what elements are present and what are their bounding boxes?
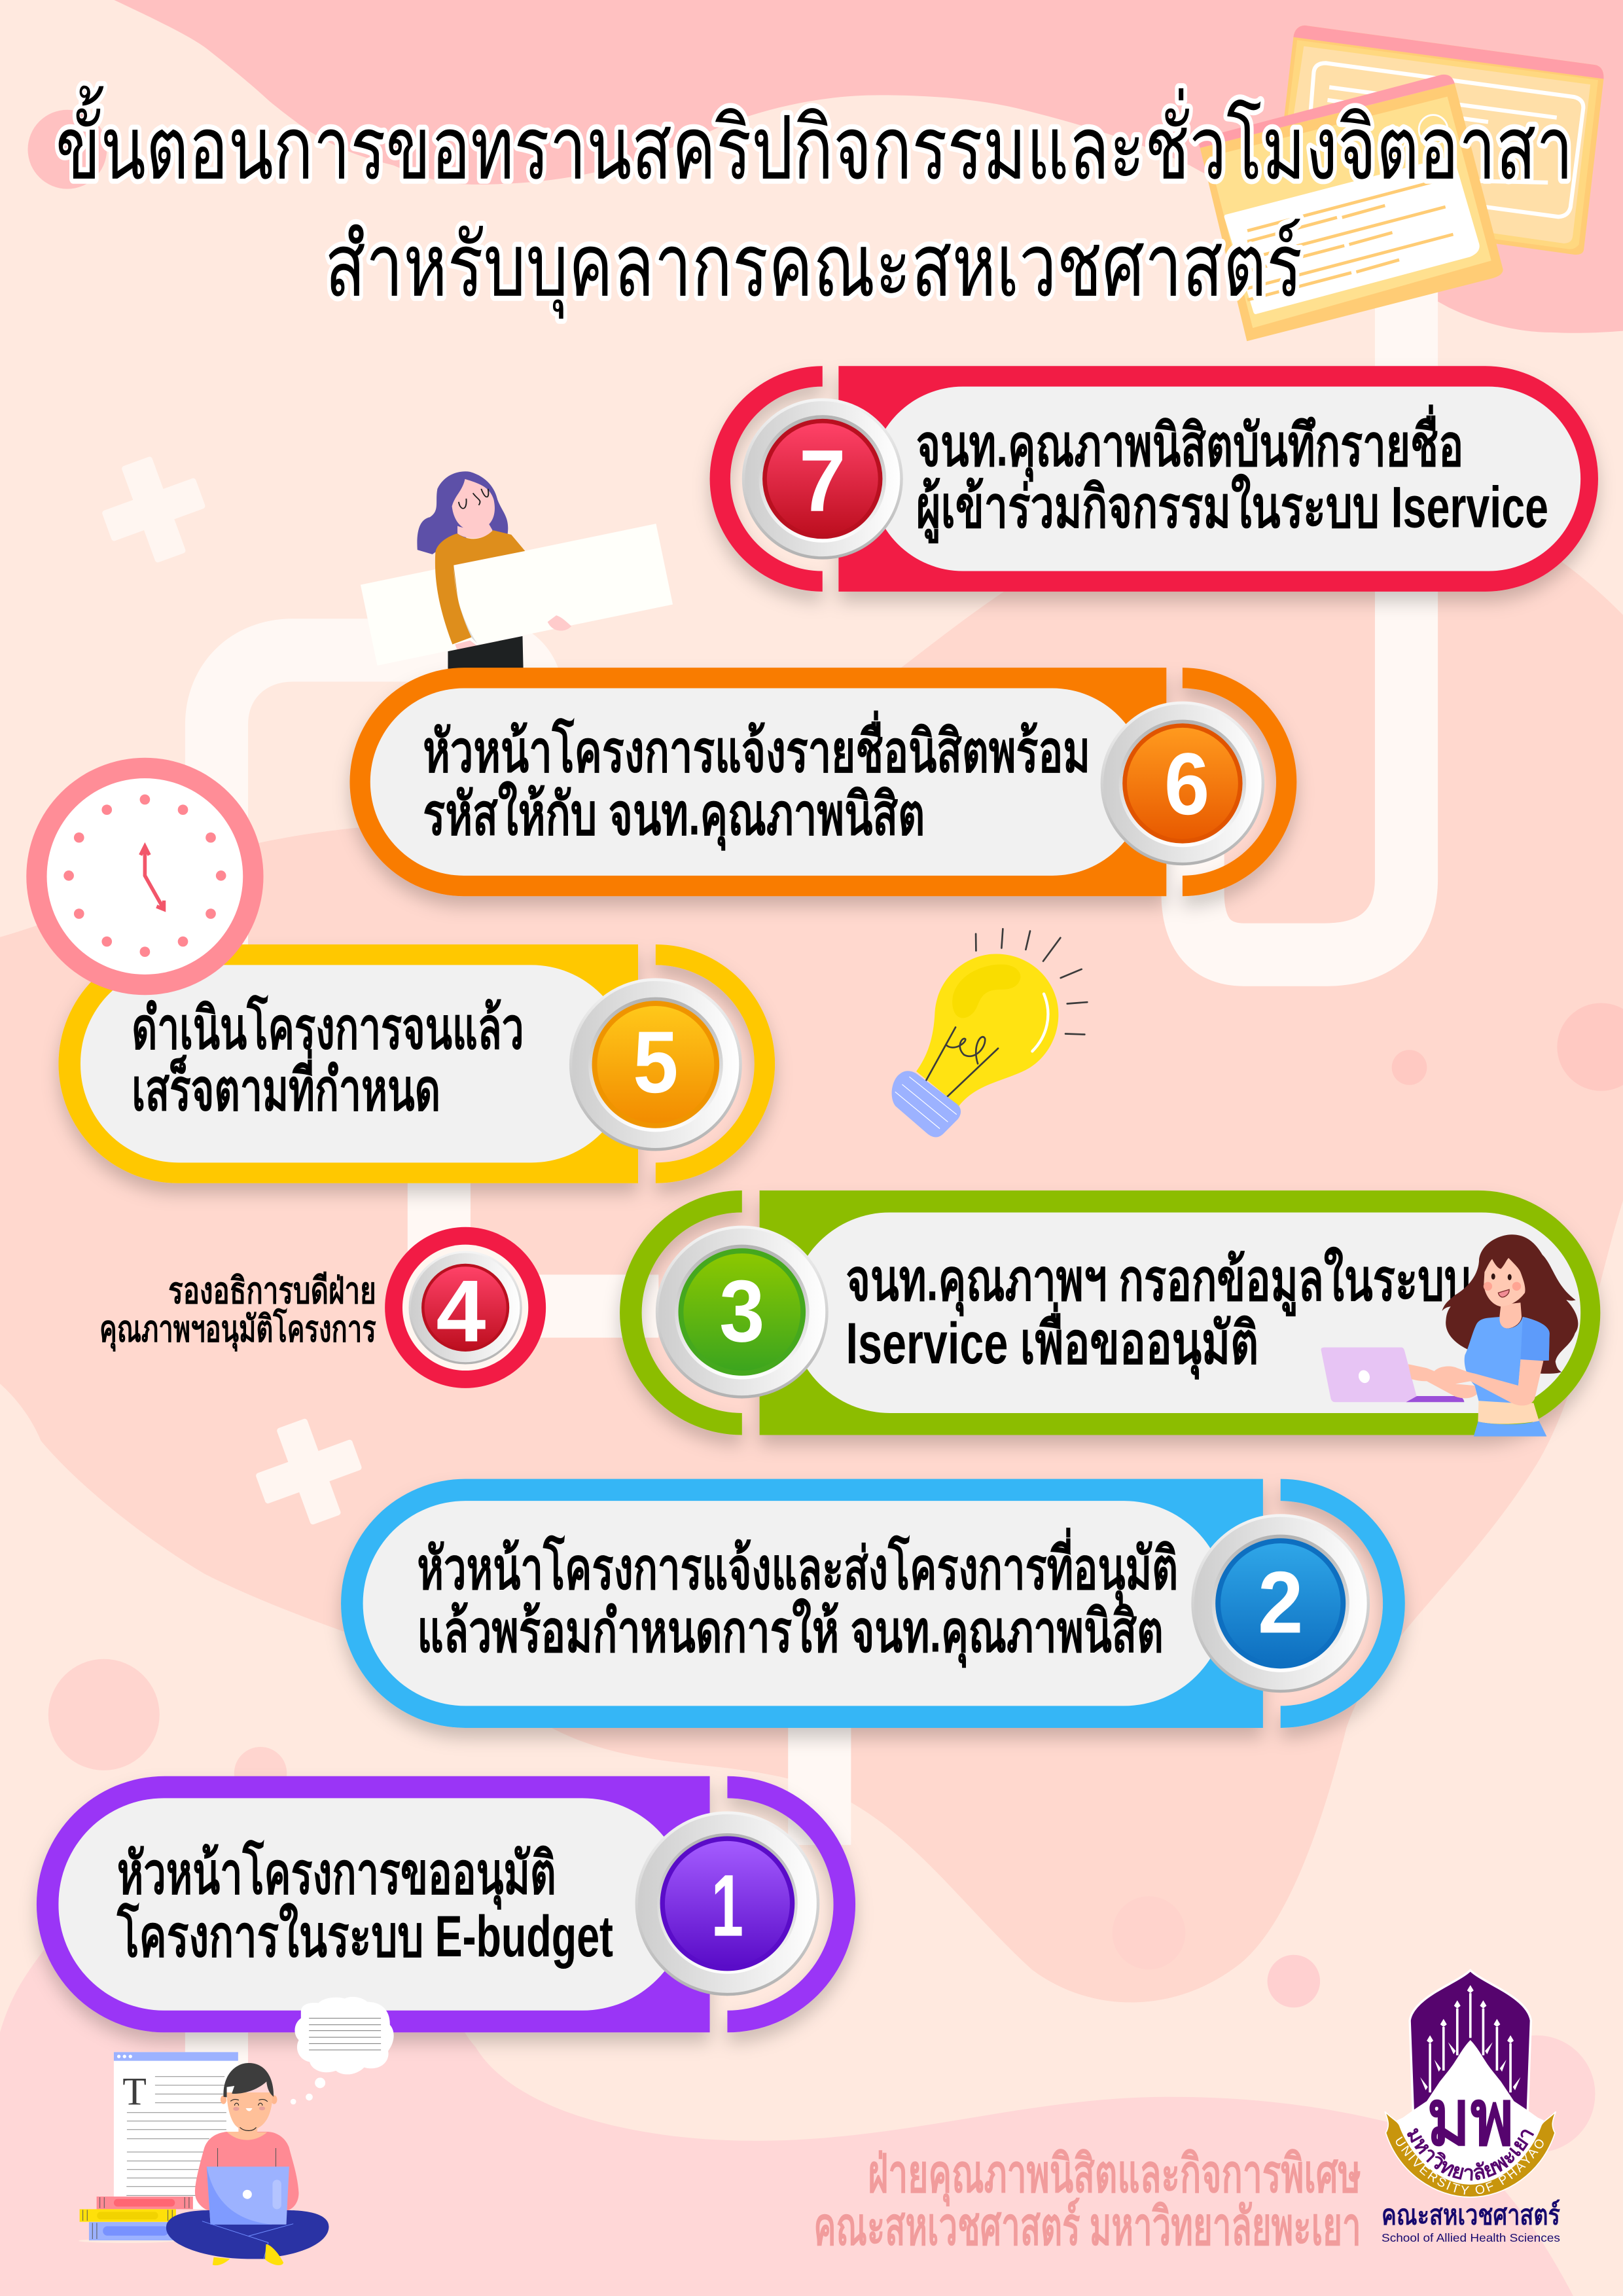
step 1 text: [116, 1840, 613, 1969]
step 4 text: [99, 1270, 376, 1352]
step 4 text: รองอธิการบดีฝ่าย: [168, 1270, 376, 1311]
step 2 text: หัวหน้าโครงการแจ้งและส่งโครงการที่อนุมัติ: [417, 1527, 1178, 1605]
step 4 badge: [385, 1227, 546, 1388]
step 7 text: [916, 404, 1548, 543]
step 4 badge: 4: [436, 1263, 486, 1360]
step 2 text: [417, 1527, 1178, 1668]
step 3 text: Iservice เพื่อขออนุมัติ: [846, 1302, 1258, 1380]
step 6 band: [349, 668, 1296, 896]
footer text: ฝ่ายคุณภาพนิสิตและกิจการพิเศษ: [868, 2145, 1361, 2207]
footer text: [813, 2145, 1361, 2257]
illustration: woman with laptop: [1321, 1234, 1578, 1437]
step 2 badge: [1193, 1516, 1368, 1691]
step 1 text: โครงการในระบบ E-budget: [116, 1903, 613, 1969]
step 5 band: [58, 944, 775, 1183]
plus sign: lower left: [243, 1406, 374, 1537]
illustration: clock: [26, 758, 264, 995]
illustration: woman holding blank sign: [361, 471, 673, 669]
plus sign: upper left: [90, 444, 218, 575]
white winding road: [217, 278, 1406, 2079]
step 6 text: หัวหน้าโครงการแจ้งรายชื่อนิสิตพร้อม: [423, 710, 1090, 784]
step 1 band: [37, 1776, 855, 2032]
step 4 text: คุณภาพฯอนุมัติโครงการ: [99, 1307, 376, 1352]
step 1 badge: 1: [711, 1857, 743, 1955]
logo: university emblem: มหาวิทยาลัยพะเยา: [1407, 2128, 1534, 2181]
step 6 text: [423, 710, 1090, 851]
step 2 badge: 2: [1258, 1554, 1303, 1652]
step 1 badge: [637, 1813, 818, 1994]
illustration: document cards: [1197, 26, 1603, 341]
step 5 text: ดำเนินโครงการจนแล้ว: [132, 995, 524, 1061]
logo: university emblem: UNIVERSITY OF PHAYAO: [1395, 2136, 1544, 2195]
step 7 badge: [743, 400, 902, 558]
illustration: light bulb: [892, 929, 1087, 1137]
step 5 badge: 5: [633, 1014, 679, 1111]
title line 2: สำหรับบุคลากรคณะสหเวชศาสตร์: [325, 217, 1302, 319]
illustration: man with laptop, books and thought bubble: T: [122, 2070, 147, 2113]
step 2 text: แล้วพร้อมกำหนดการให้ จนท.คุณภาพนิสิต: [417, 1598, 1164, 1668]
step 7 band: [710, 366, 1598, 592]
logo: university emblem: มพ: [1427, 2074, 1514, 2162]
step 5 badge: [571, 980, 741, 1149]
step 3 text: [846, 1247, 1471, 1380]
illustration: man with laptop, books and thought bubble: [79, 1997, 394, 2265]
step 6 badge: [1102, 703, 1263, 864]
step 5 text: [132, 995, 524, 1122]
logo: university emblem: [1385, 1969, 1556, 2198]
step 3 band: [620, 1191, 1600, 1435]
step 2 band: [341, 1479, 1405, 1728]
logo text: faculty name: School of Allied Health Sciences: [1382, 2231, 1560, 2244]
logo text: faculty name: [1382, 2198, 1560, 2244]
title: [56, 86, 1573, 319]
step 6 badge: 6: [1164, 736, 1209, 833]
step 6 text: รหัสให้กับ จนท.คุณภาพนิสิต: [423, 781, 925, 851]
logo text: faculty name: คณะสหเวชศาสตร์: [1382, 2198, 1560, 2231]
step 3 badge: [657, 1227, 827, 1397]
step 3 badge: 3: [719, 1263, 764, 1360]
step 1 text: หัวหน้าโครงการขออนุมัติ: [117, 1840, 556, 1910]
step 5 text: เสร็จตามที่กำหนด: [132, 1049, 440, 1122]
step 7 badge: 7: [799, 433, 846, 530]
